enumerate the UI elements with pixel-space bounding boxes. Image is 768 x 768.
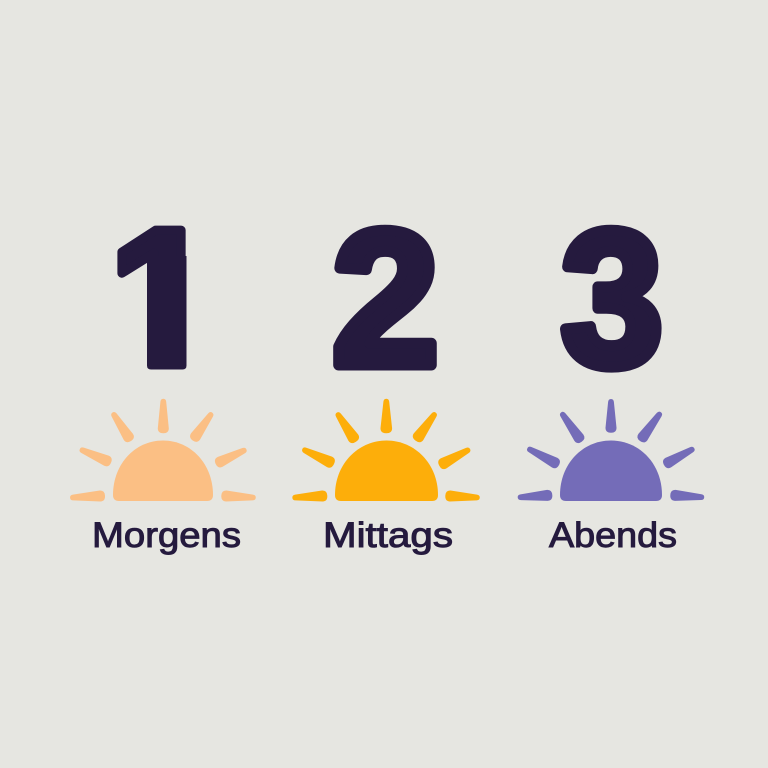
- sun rays: [70, 399, 256, 503]
- sun dome: [560, 440, 662, 501]
- icon: evening sun: [517, 399, 705, 503]
- icon: midday sun: [292, 399, 480, 503]
- sun rays: [517, 399, 705, 503]
- label: Morgens: Morgens: [92, 516, 241, 555]
- number 1: [117, 226, 186, 370]
- sun rays: [292, 399, 480, 503]
- column: Morgens: [70, 226, 256, 555]
- number 2: 2: [332, 190, 439, 406]
- sun dome: [335, 440, 438, 501]
- label: Abends: Abends: [549, 516, 677, 555]
- infographic canvas: [70, 224, 704, 555]
- number 1: 1: [108, 188, 218, 407]
- column: Abends: [517, 190, 705, 555]
- icon: morning sun: [70, 399, 256, 503]
- label: Mittags: Mittags: [323, 516, 453, 555]
- number 3: 3: [561, 190, 663, 406]
- sun dome: [113, 440, 213, 501]
- column: Mittags: [292, 190, 480, 555]
